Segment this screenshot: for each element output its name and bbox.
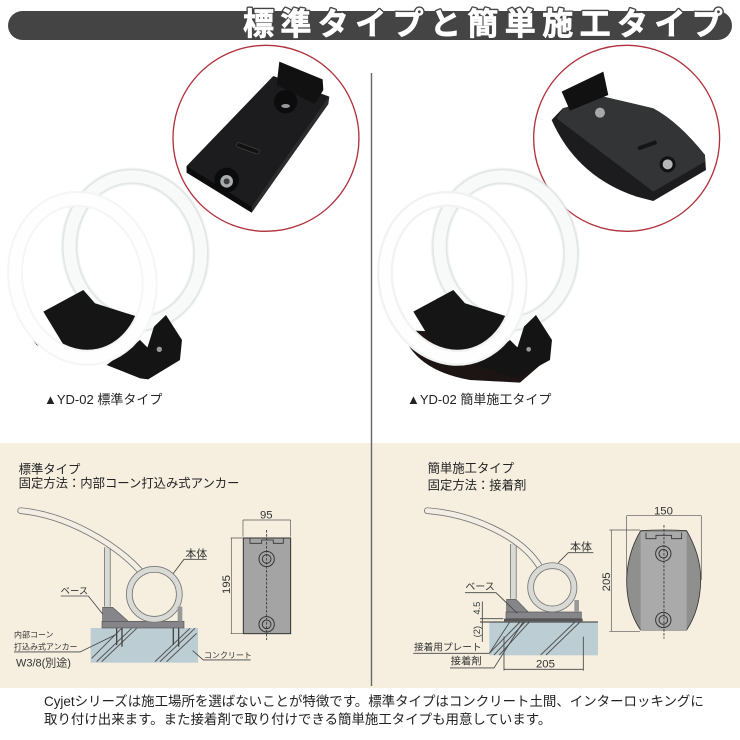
front ring xyxy=(0,186,164,370)
diagram: standard type: W3/8(別途) xyxy=(16,657,71,670)
right block back xyxy=(477,340,527,377)
base cradle xyxy=(43,290,137,352)
heading: easy type xyxy=(428,461,526,492)
caption: standard type: ▲YD-02 標準タイプ xyxy=(44,392,162,407)
back ring xyxy=(426,164,585,336)
title banner xyxy=(8,7,732,42)
callouts xyxy=(14,559,251,660)
diagram: standard type: 195 xyxy=(221,575,233,594)
right block back xyxy=(107,340,157,379)
diagram: standard type: 95 xyxy=(260,510,273,522)
plan view xyxy=(243,538,291,634)
diagram: easy type: 本体 xyxy=(570,540,592,554)
description text: 取り付け出来ます。また接着剤で取り付けできる簡単施工タイプも用意しています。 xyxy=(44,711,551,727)
diagram: easy type: 接着剤 xyxy=(451,655,482,668)
diagram: standard type: コンクリート xyxy=(204,651,252,660)
description text xyxy=(44,694,704,727)
diagram: easy type: 205 xyxy=(601,572,613,591)
plan view xyxy=(627,530,701,630)
heading: standard type: 固定方法：内部コーン打込み式アンカー xyxy=(19,476,239,491)
dimensions xyxy=(231,520,291,634)
title banner: 標準タイプと簡単施工タイプ xyxy=(243,7,729,42)
base cradle xyxy=(413,290,507,352)
description text: Cyjetシリーズは施工場所を選ばないことが特徴です。標準タイプはコンクリート土間、インターロッキングに xyxy=(44,694,704,709)
right block xyxy=(133,315,182,379)
tube side view xyxy=(21,511,180,621)
diagram: standard type: ベース xyxy=(61,586,88,596)
concrete block xyxy=(91,628,198,663)
heading: standard type: 標準タイプ xyxy=(19,461,81,476)
diagram: easy type: 接着用プレート xyxy=(414,642,482,654)
heading: easy type: 固定方法：接着剤 xyxy=(428,477,526,492)
left foot xyxy=(31,330,50,350)
base side view xyxy=(102,607,184,628)
back ring xyxy=(56,164,215,336)
diagram: standard type: 本体 xyxy=(185,546,207,560)
photo: easy type detail circle xyxy=(534,45,720,231)
heading: standard type xyxy=(19,461,239,491)
heading: easy type: 簡単施工タイプ xyxy=(428,461,515,476)
diagram: easy type: 150 xyxy=(654,506,673,518)
photo: standard type ring product xyxy=(0,164,215,379)
caption: easy type: ▲YD-02 簡単施工タイプ xyxy=(407,392,551,407)
title banner: 標準タイプと簡単施工タイプ xyxy=(243,7,729,42)
divider between types xyxy=(370,73,372,686)
front ring xyxy=(370,186,534,370)
anchors xyxy=(117,627,179,647)
diagram: standard type xyxy=(14,461,291,670)
diagram: easy type: ベース xyxy=(465,581,495,593)
concrete block xyxy=(489,622,598,655)
tube side view xyxy=(427,511,577,612)
diagram: standard type: 内部コーン xyxy=(14,629,54,639)
diagram: easy type: 4.5 xyxy=(472,602,482,615)
dimensions xyxy=(609,516,701,631)
base side view xyxy=(506,599,581,619)
diagram: easy type: (2) xyxy=(472,626,482,637)
photo: easy type ring product xyxy=(370,164,585,383)
callouts xyxy=(413,553,593,671)
photo: standard type detail circle xyxy=(173,45,359,231)
right block xyxy=(503,315,552,377)
diagram: easy type: 205 xyxy=(536,658,555,670)
panel: specification background xyxy=(0,443,740,688)
adhesive plate xyxy=(402,330,550,383)
diagram: easy type xyxy=(413,461,701,671)
diagram: standard type: 打込み式アンカー xyxy=(14,642,78,652)
